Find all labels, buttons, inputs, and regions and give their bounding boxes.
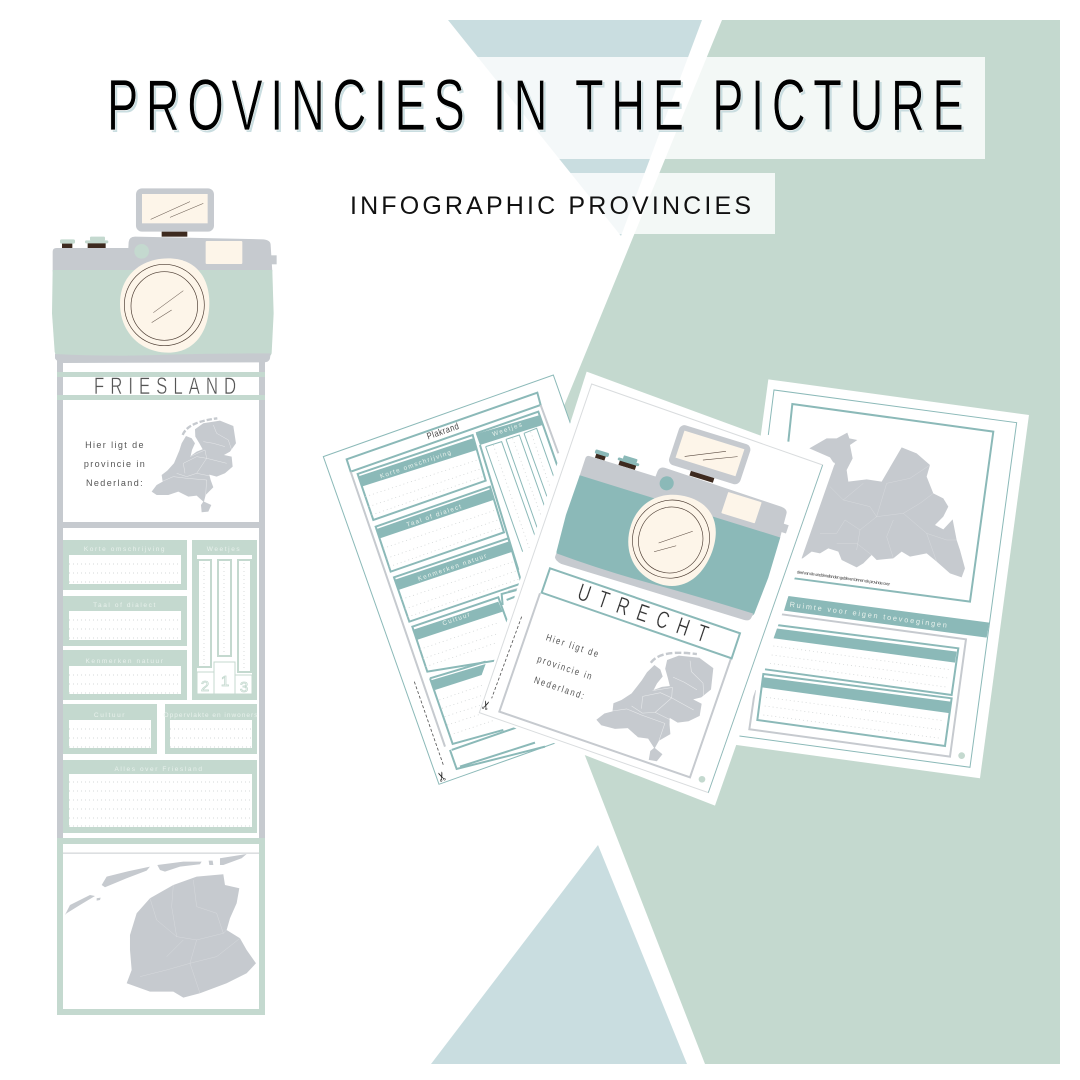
side rails — [57, 355, 265, 840]
box: Alles over Friesland — [63, 760, 257, 833]
caption under map: deel van de waddeneilanden gebleven binnen de provincie over — [797, 569, 891, 587]
box: own notes 2 — [757, 674, 952, 746]
box: Korte omschrijving — [63, 540, 187, 590]
panel: Friesland infographic — [52, 188, 277, 1015]
map: Netherlands — [152, 418, 236, 512]
illustration: camera (teal) — [551, 400, 809, 624]
text: location intro — [533, 632, 601, 702]
subtitle: INFOGRAPHIC PROVINCIES — [350, 192, 751, 220]
background: green shape — [505, 20, 1060, 1064]
box: Kenmerken natuur: Kenmerken natuur — [85, 658, 165, 665]
sheet: right page with Utrecht map — [719, 379, 1029, 778]
box: Weetjes: 1 — [221, 673, 229, 690]
box: own notes 1 — [765, 625, 958, 695]
sheet: left page with info boxes — [323, 375, 669, 784]
box: Kenmerken natuur — [394, 538, 522, 622]
cut line with scissors: ✂ — [433, 769, 451, 784]
box: Weetjes — [192, 540, 257, 700]
box: Weetjes: 2 — [201, 678, 209, 695]
box: Oppervlakte en inwoners — [164, 704, 258, 754]
box: Korte omschrijving: Korte omschrijving — [379, 449, 453, 480]
strip: Plakrand — [347, 393, 541, 472]
band: Utrecht heading: UTRECHT — [574, 579, 712, 648]
heading: Friesland: FRIESLAND — [94, 373, 236, 400]
podium — [197, 662, 252, 694]
map: Friesland — [65, 854, 256, 998]
box: Weetjes: Weetjes — [207, 546, 241, 553]
text: location intro: provincie in — [84, 459, 146, 469]
band: Ruimte voor eigen toevoegingen — [784, 596, 989, 638]
box: Weetjes — [476, 412, 567, 605]
frame: map — [788, 404, 993, 602]
box: Korte omschrijving: Korte omschrijving — [84, 546, 166, 553]
text: location intro: Nederland: — [533, 674, 587, 702]
title panel — [90, 57, 985, 159]
box: Taal of dialect — [63, 596, 187, 646]
text: location intro: Hier ligt de — [85, 440, 145, 450]
box: Taal of dialect — [376, 487, 504, 572]
illustration: camera (green) — [52, 188, 277, 363]
box: Taal of dialect: Taal of dialect — [406, 503, 463, 529]
map: Netherlands — [590, 633, 719, 771]
cut line with scissors: ✂ — [478, 698, 495, 712]
frame: Friesland map — [57, 838, 265, 1015]
box: Oppervlakte en inwoners: Oppervlakte en inwoners — [164, 712, 258, 719]
band: Utrecht heading — [542, 568, 740, 658]
strip: Plakrand: Plakrand — [425, 420, 461, 442]
background: bottom blue triangle — [431, 845, 687, 1064]
box: Taal of dialect: Taal of dialect — [93, 602, 157, 609]
box: Cultuur: Cultuur — [442, 611, 472, 627]
box: Kenmerken natuur — [63, 650, 187, 700]
map: Utrecht — [763, 433, 965, 577]
cut line with scissors — [414, 682, 451, 784]
box: Kenmerken natuur: Kenmerken natuur — [417, 552, 489, 583]
band: Ruimte voor eigen toevoegingen: Ruimte voor eigen toevoegingen — [789, 600, 948, 630]
heading: Friesland — [57, 372, 265, 400]
text: location intro: Nederland: — [86, 478, 144, 488]
title: PROVINCIES IN THE PICTURE — [109, 67, 966, 147]
box: Weetjes: 3 — [240, 679, 248, 696]
background: top blue triangle — [448, 20, 702, 236]
box: Cultuur — [63, 704, 157, 754]
box: Korte omschrijving — [358, 435, 486, 520]
box: Weetjes: Weetjes — [492, 421, 524, 438]
box: Cultuur — [412, 597, 520, 672]
text: location intro: Hier ligt de — [545, 632, 601, 660]
page marker — [699, 776, 705, 783]
sheet: middle page Utrecht — [477, 372, 835, 806]
subtitle panel — [330, 173, 775, 234]
text: location intro: provincie in — [536, 653, 595, 682]
cut line with scissors — [478, 617, 522, 712]
page marker — [958, 752, 965, 759]
title: PROVINCIES IN THE PICTURE — [107, 65, 964, 145]
box: Oppervlakte — [430, 662, 503, 744]
text: location intro — [84, 440, 146, 488]
box: Alles over Friesland: Alles over Friesland — [114, 766, 204, 773]
box: Cultuur: Cultuur — [94, 712, 126, 719]
